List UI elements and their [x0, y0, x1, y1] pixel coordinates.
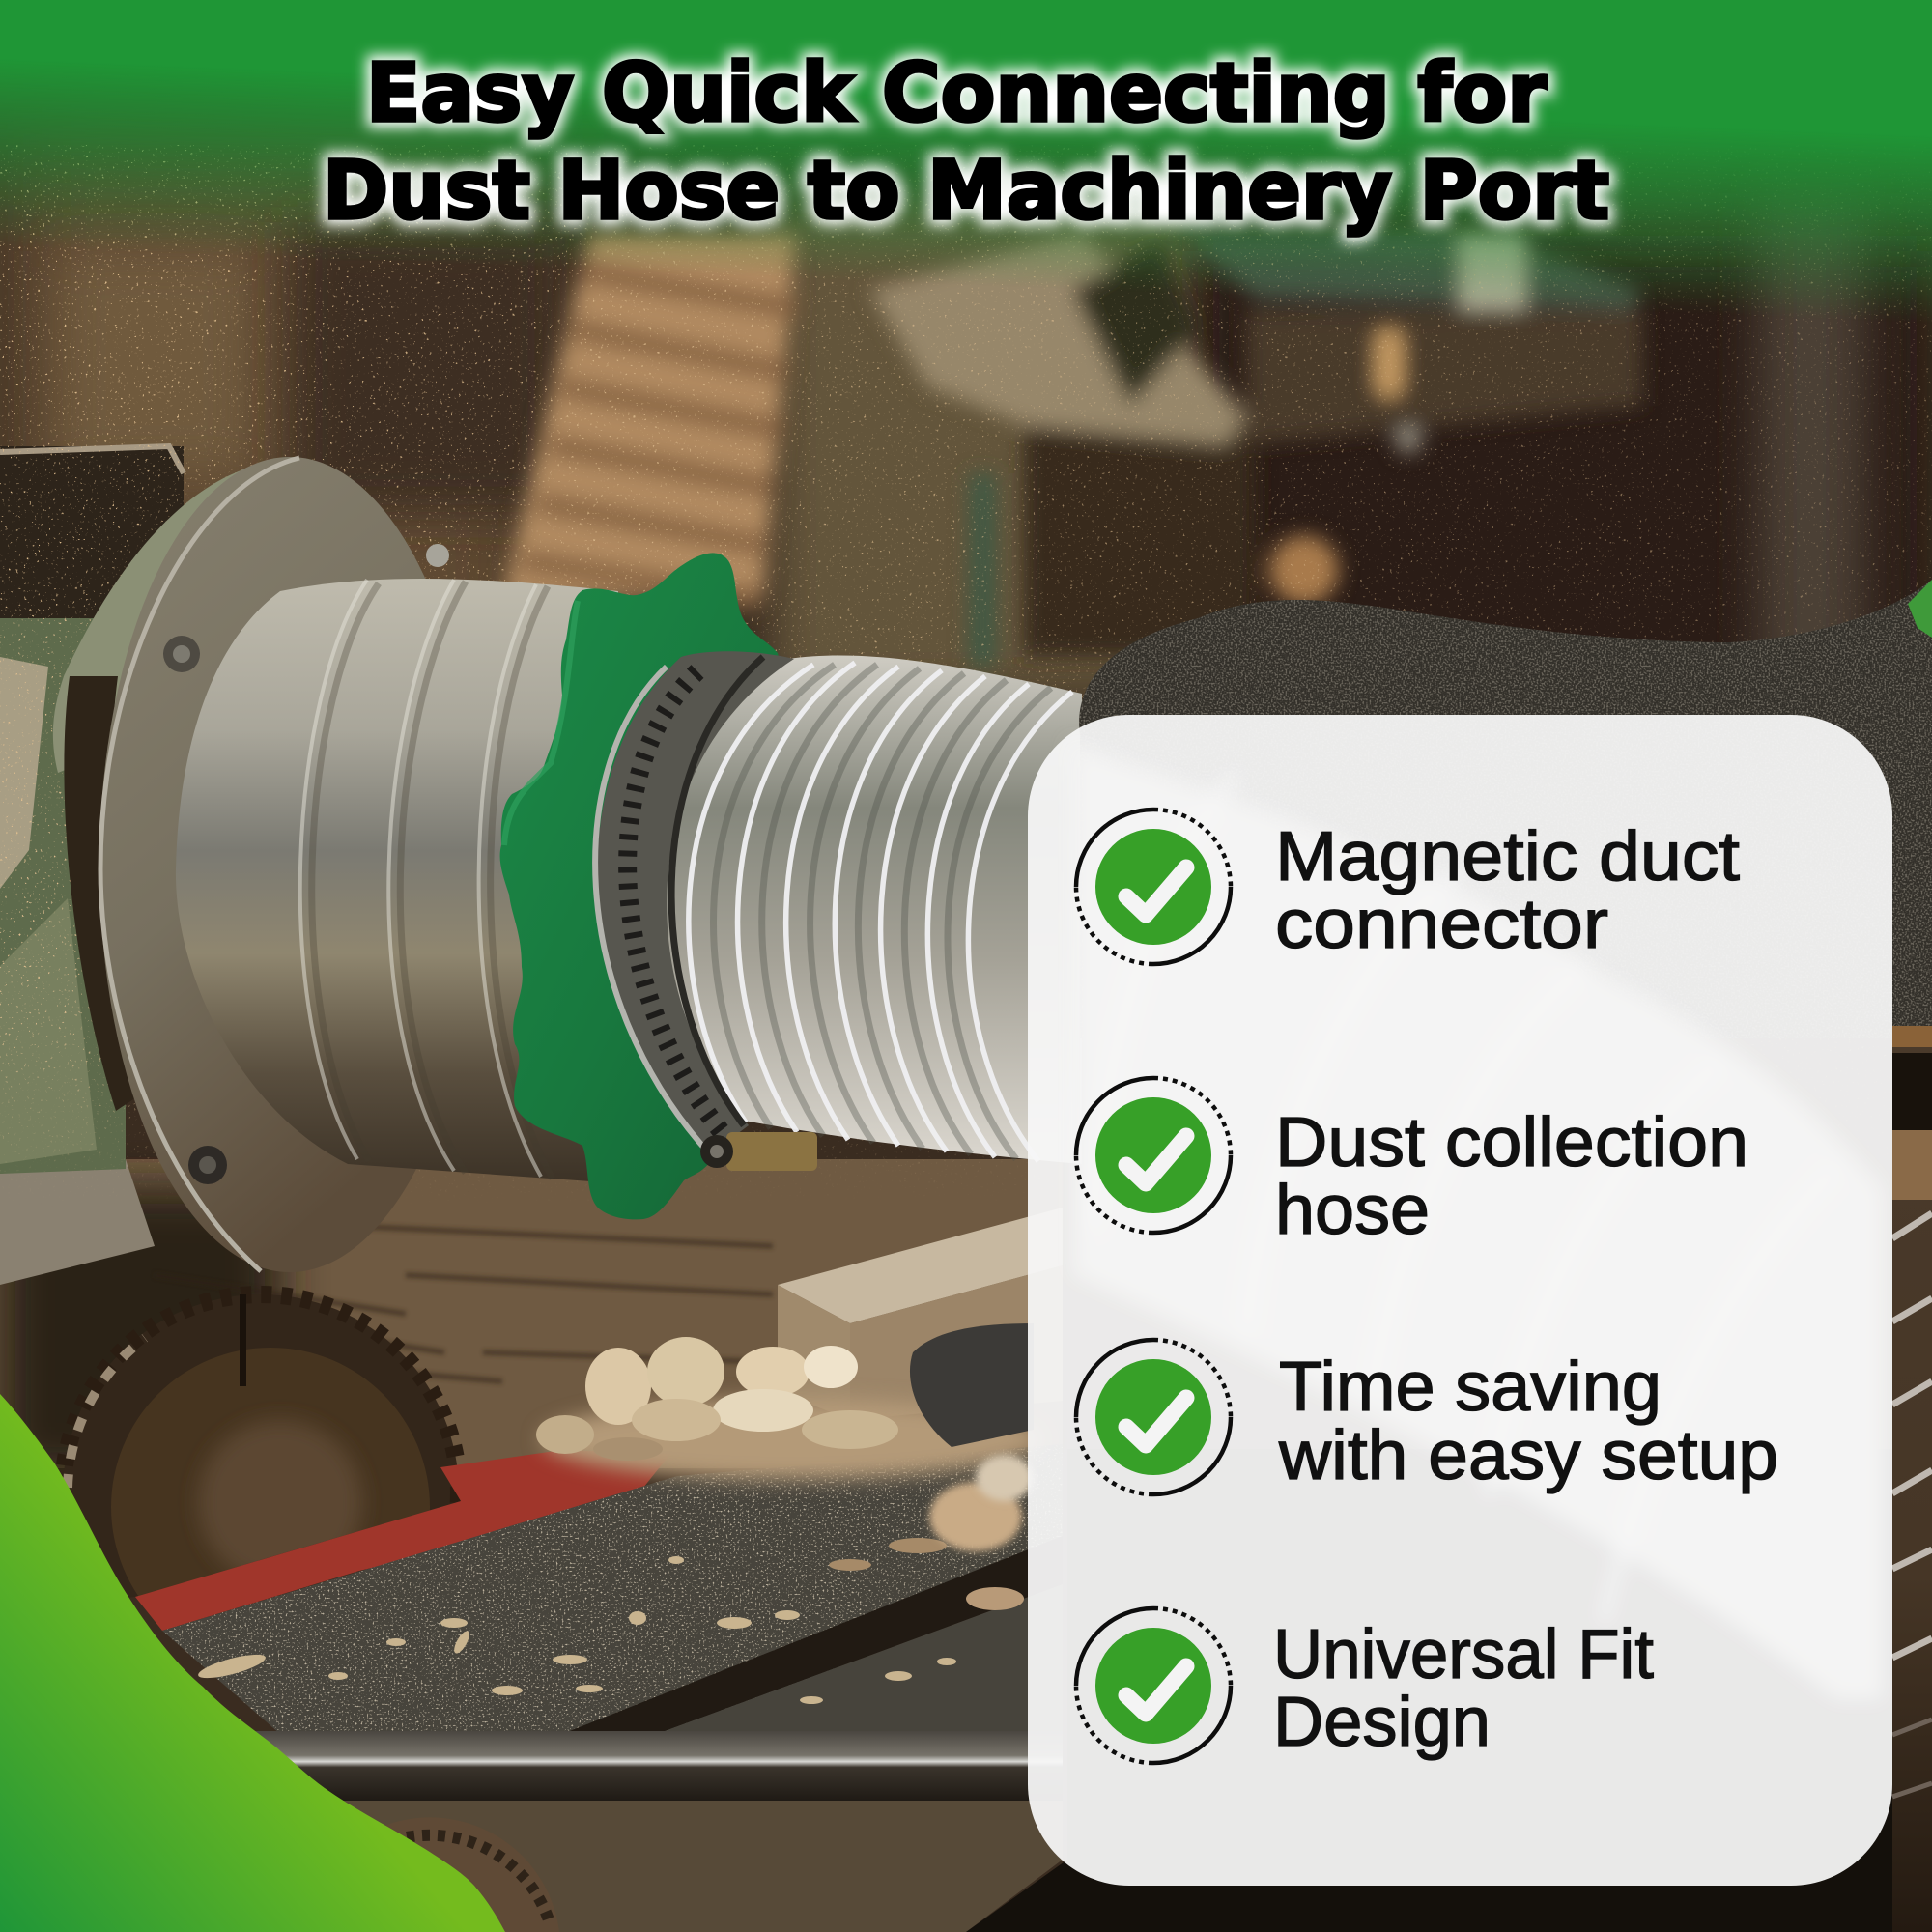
blurred hose in background — [502, 232, 797, 599]
feature panel — [1028, 715, 1892, 1886]
feature: dust collection hose: Dust collection — [1275, 1104, 1748, 1181]
title: Easy Quick Connecting for — [366, 45, 1548, 140]
saw blade — [56, 1286, 464, 1596]
dark housing and green machine base — [0, 446, 184, 1174]
feature: magnetic duct connector — [1076, 810, 1740, 964]
right edge hose and shavings strip — [1892, 1026, 1932, 1932]
feature: universal fit — [1076, 1608, 1654, 1763]
hose clamp — [595, 651, 794, 1154]
feature: universal fit: Universal Fit — [1273, 1616, 1654, 1693]
feature: time saving: Time saving — [1279, 1349, 1662, 1426]
green corner swoosh — [0, 1394, 505, 1932]
screw top — [163, 636, 200, 672]
title: Dust Hose to Machinery Port — [323, 143, 1609, 238]
steel rail — [222, 1731, 1063, 1801]
check icon 4 — [1076, 1608, 1231, 1763]
metal cylinder — [176, 579, 618, 1183]
blurred machine housing — [869, 232, 1642, 667]
screw bottom — [188, 1146, 227, 1184]
feature: time saving: with easy setup — [1278, 1417, 1778, 1494]
check icon 3 — [1076, 1340, 1231, 1494]
feature: magnetic duct connector: Magnetic duct — [1275, 818, 1740, 895]
check icon 2 — [1076, 1078, 1231, 1233]
feature: dust collection hose: hose — [1275, 1172, 1430, 1249]
green locking nut — [500, 553, 831, 1219]
title: Easy Quick Connecting for — [366, 45, 1548, 140]
feature: time saving — [1076, 1340, 1778, 1494]
dust specks — [0, 145, 1932, 1208]
top green fade — [0, 0, 1932, 348]
title: Dust Hose to Machinery Port — [323, 143, 1609, 238]
check icon 1 — [1076, 810, 1231, 964]
wood flecks on table — [196, 1538, 1024, 1704]
nut face highlight — [504, 601, 578, 845]
red table insert — [135, 1450, 670, 1631]
flange rim — [53, 462, 299, 1111]
screw rear — [426, 544, 449, 567]
rear hose behind panel — [1072, 744, 1884, 1700]
hose body — [655, 655, 1082, 1164]
dark floor below panel — [966, 1449, 1932, 1932]
workshop wall and wood — [0, 1159, 1063, 1468]
flange plate — [99, 457, 480, 1272]
lower table surface — [290, 1801, 1063, 1932]
feature: universal fit: Design — [1273, 1684, 1491, 1761]
feature: dust collection hose — [1076, 1078, 1748, 1249]
lower saw blade — [300, 1817, 559, 1932]
clamp screw housing — [700, 1132, 817, 1171]
dark fence knob — [910, 1323, 1034, 1447]
gloved hand — [1063, 580, 1932, 1063]
saw table top — [162, 1444, 1063, 1734]
title — [323, 45, 1609, 238]
feature: magnetic duct connector: connector — [1275, 886, 1608, 963]
wood shavings pile — [536, 1337, 1043, 1551]
